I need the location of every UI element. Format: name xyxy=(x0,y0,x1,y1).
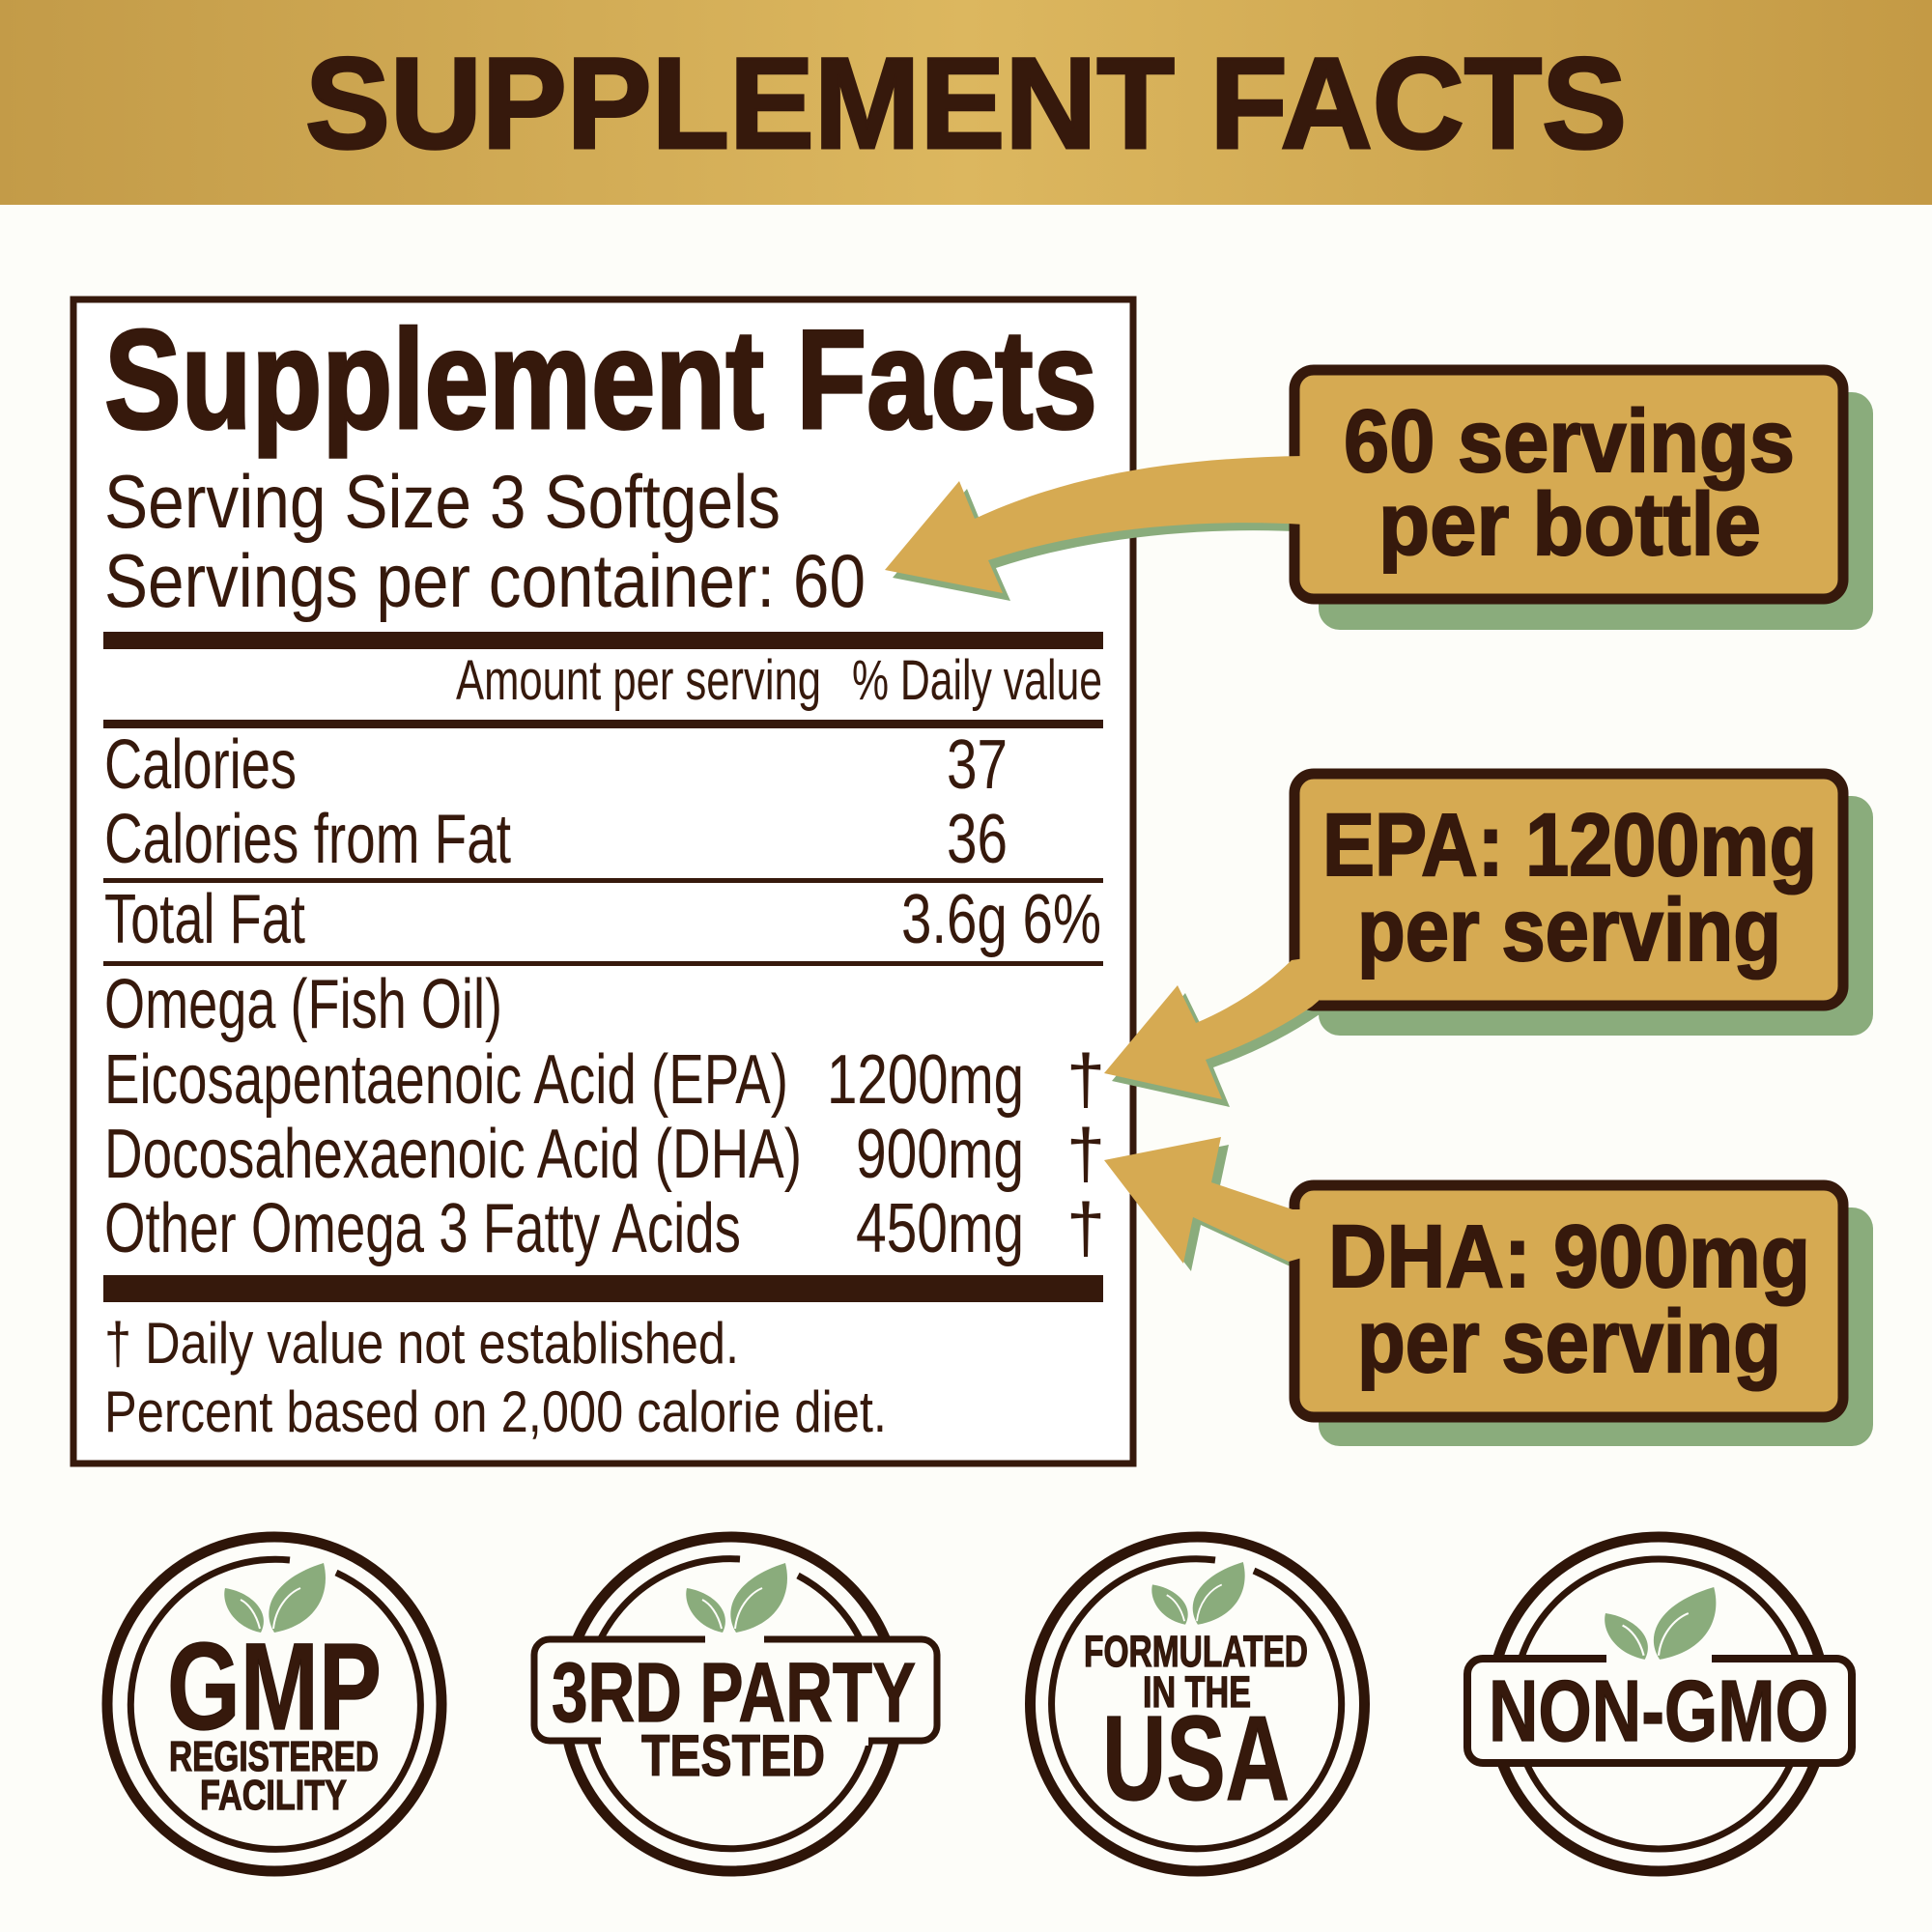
callout: 60 servings xyxy=(1294,370,1843,599)
title: SUPPLEMENT FACTS xyxy=(305,32,1627,176)
arrow: 60 servings to servings per container xyxy=(885,456,1304,593)
row: other omega 3: 450mg xyxy=(856,1190,1024,1267)
row: omega: Omega (Fish Oil) xyxy=(104,966,502,1043)
icon: leaves xyxy=(686,1563,787,1633)
badge: 3rd party tested xyxy=(534,1537,937,1871)
label heading: Supplement Facts xyxy=(104,300,1097,458)
row: EPA: Eicosapentaenoic Acid (EPA) xyxy=(104,1041,788,1119)
badge: formulated in the USA: IN THE xyxy=(1143,1667,1251,1717)
badge: GMP registered facility: REGISTERED xyxy=(169,1733,379,1780)
callout: DHA: DHA: 900mg xyxy=(1328,1208,1810,1306)
row: calories xyxy=(104,726,1008,804)
row: other omega 3: Other Omega 3 Fatty Acids xyxy=(104,1190,741,1267)
row: DHA: 900mg xyxy=(856,1116,1024,1193)
icon: leaves xyxy=(1605,1587,1716,1660)
row: DHA: Docosahexaenoic Acid (DHA) xyxy=(104,1116,802,1193)
arrow: EPA callout to EPA row xyxy=(1104,956,1319,1099)
row: calories from fat: 36 xyxy=(947,801,1008,878)
badge text: NON-GMO xyxy=(1489,1663,1829,1760)
row: calories: 37 xyxy=(947,726,1008,804)
callout shadows xyxy=(893,392,1873,1446)
badge: formulated in the USA: USA xyxy=(1102,1692,1290,1826)
column header: amount: Amount per serving xyxy=(456,649,821,712)
badge: formulated in the USA xyxy=(1030,1537,1364,1871)
callout: 60 servings: per bottle xyxy=(1378,475,1761,574)
footnote: percent: Percent based on 2,000 calorie diet. xyxy=(104,1379,887,1444)
badge: 3rd party tested: TESTED xyxy=(641,1723,825,1788)
badge: GMP registered facility: FACILITY xyxy=(200,1772,347,1819)
panel: supplement facts label xyxy=(73,299,1133,1463)
row: EPA: † xyxy=(1066,1041,1105,1119)
row: calories from fat: Calories from Fat xyxy=(104,801,511,878)
badge: GMP registered facility xyxy=(107,1537,441,1871)
icon: leaves xyxy=(1151,1562,1245,1625)
column header: daily value: % Daily value xyxy=(852,649,1102,712)
icon: leaves xyxy=(224,1563,326,1633)
row: calories: Calories xyxy=(104,726,297,804)
badge text: GMP xyxy=(167,1618,382,1756)
badge text: FORMULATED xyxy=(1084,1627,1308,1676)
row: calories from fat xyxy=(104,801,1008,878)
servings per container: Servings per container: 60 xyxy=(104,538,866,623)
header banner xyxy=(0,0,1932,205)
row: total fat xyxy=(104,881,1101,958)
badge text: 3RD PARTY xyxy=(552,1646,916,1740)
callout: 60 servings: 60 servings xyxy=(1344,392,1795,491)
row: EPA: 1200mg xyxy=(827,1041,1024,1119)
callout: DHA xyxy=(1294,1185,1843,1417)
callout: EPA xyxy=(1294,774,1843,1006)
serving size: Serving Size 3 Softgels xyxy=(104,459,781,544)
row: total fat: Total Fat xyxy=(104,881,305,958)
row: total fat: 3.6g 6% xyxy=(901,881,1101,958)
arrow: DHA callout to DHA row xyxy=(1104,1137,1309,1264)
badge: non-GMO xyxy=(1467,1537,1852,1871)
callout: EPA: per serving xyxy=(1357,881,1781,980)
callout: DHA: per serving xyxy=(1357,1293,1781,1391)
row: DHA: † xyxy=(1066,1116,1105,1193)
row: other omega 3: † xyxy=(1066,1190,1105,1267)
footnote: daily value: † Daily value not established. xyxy=(104,1311,739,1376)
callout: EPA: EPA: 1200mg xyxy=(1322,796,1817,895)
